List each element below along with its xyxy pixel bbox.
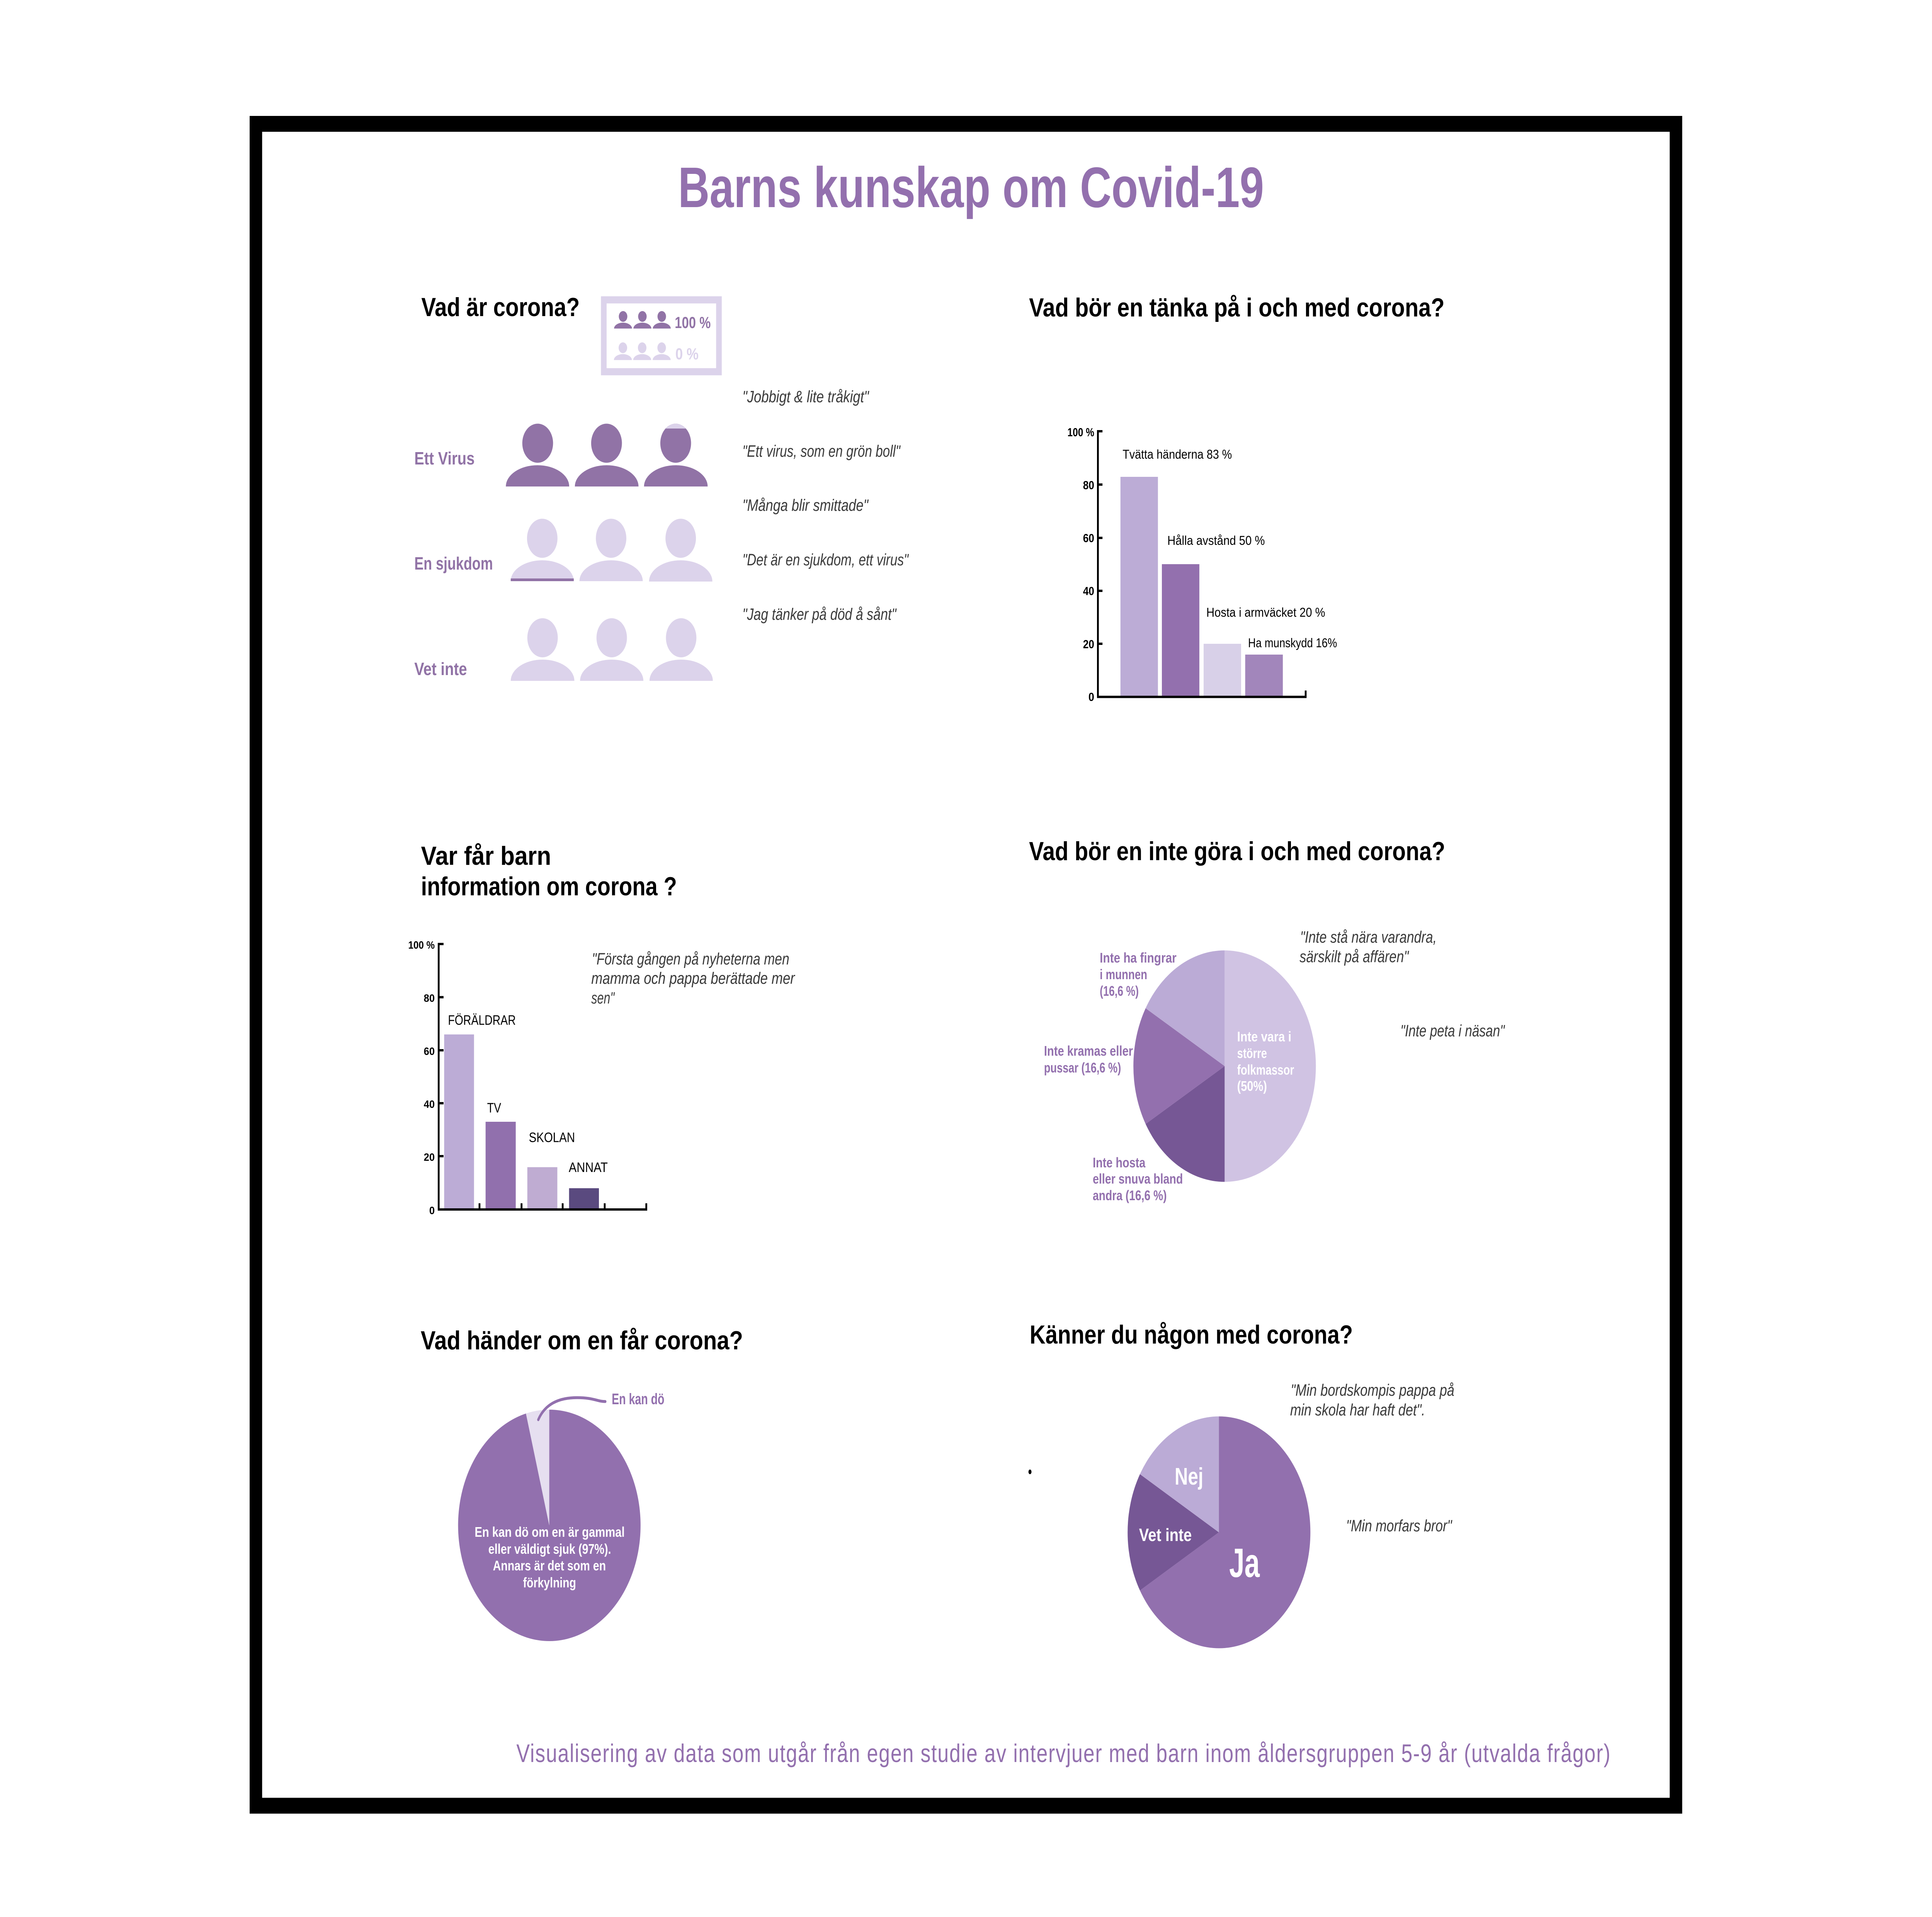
heading: Vad bör en tänka på: Vad bör en tänka på i och med corona? bbox=[1029, 293, 1445, 322]
pie label: Nej: Nej bbox=[1175, 1463, 1203, 1490]
quote: bordskompis: "Min bordskompis pappa på bbox=[1291, 1381, 1454, 1400]
panel: where children get information bbox=[408, 841, 796, 1217]
pie label: cough bbox=[1093, 1155, 1183, 1203]
pie label: fingers: i munnen bbox=[1100, 967, 1147, 982]
footer note: Visualisering av data som utgår från egen studie av intervjuer med barn inom åldersgruppen 5-9 år (utvalda frågor) bbox=[516, 1739, 1610, 1767]
quote: stand close: "Inte stå nära varandra, bbox=[1300, 928, 1437, 946]
pie label: crowds: folkmassor bbox=[1237, 1062, 1294, 1078]
bar labels: TV bbox=[487, 1100, 501, 1116]
pie chart: what not to do bbox=[1133, 951, 1316, 1182]
quote: mamma och pappa berättade mer bbox=[591, 969, 796, 988]
bar labels bbox=[448, 1012, 608, 1175]
pie label: Ja: Ja bbox=[1229, 1541, 1260, 1586]
pie chart: what happens bbox=[458, 1410, 641, 1641]
pie chart: know someone bbox=[1128, 1416, 1310, 1648]
quote: sen" bbox=[591, 989, 615, 1007]
row label: Ett Virus: Ett Virus bbox=[414, 449, 474, 468]
axis labels bbox=[1068, 425, 1094, 704]
pie label: hugs: pussar (16,6 %) bbox=[1044, 1060, 1121, 1075]
axis labels: 80 bbox=[1083, 478, 1094, 492]
quote: bordskompis: min skola har haft det". bbox=[1290, 1401, 1425, 1419]
bar labels: Tvätta händerna 83 % bbox=[1122, 447, 1232, 462]
quote: stand close: särskilt på affären" bbox=[1299, 947, 1410, 966]
legend label 100 percent: 100 % bbox=[675, 314, 711, 332]
axis labels: 40 bbox=[424, 1099, 435, 1111]
panel: do you know someone bbox=[1029, 1320, 1454, 1648]
legend icons: 0 percent row bbox=[614, 342, 671, 360]
panel: what not to do bbox=[1029, 837, 1505, 1203]
legend icons: 100 percent row bbox=[614, 311, 671, 328]
axis labels: 40 bbox=[1083, 584, 1094, 598]
quote: bordskompis bbox=[1290, 1381, 1454, 1419]
axis labels bbox=[408, 939, 435, 1217]
title: Barns kunskap om Covid-19 bbox=[678, 156, 1264, 219]
pie text: eller väldigt sjuk (97%). bbox=[488, 1541, 611, 1557]
heading: Var får barn information: information om corona ? bbox=[421, 872, 677, 901]
bar labels: ANNAT bbox=[569, 1160, 608, 1175]
bar chart: precautions bbox=[1068, 425, 1337, 704]
pie label: cough: eller snuva bland bbox=[1093, 1171, 1183, 1187]
axis labels: 60 bbox=[424, 1046, 435, 1058]
quote: morfars bror: "Min morfars bror" bbox=[1346, 1517, 1452, 1535]
heading: Var får barn information: Var får barn bbox=[421, 841, 551, 870]
panel: what is corona bbox=[414, 293, 909, 681]
heading: Vad är corona: Vad är corona? bbox=[421, 293, 580, 321]
quote: "Första gången på nyheterna men bbox=[592, 950, 789, 968]
axes bbox=[439, 944, 646, 1209]
pie label: Vet inte: Vet inte bbox=[1139, 1525, 1192, 1545]
pie text: Annars är det som en bbox=[493, 1558, 606, 1573]
legend frame bbox=[604, 300, 719, 372]
bars bbox=[444, 1034, 599, 1209]
panel: what happens bbox=[421, 1326, 743, 1641]
quote bbox=[591, 950, 796, 1007]
quote: stand close bbox=[1299, 928, 1437, 966]
bar labels: SKOLAN bbox=[529, 1129, 575, 1145]
panel: what to think about bbox=[1029, 293, 1445, 704]
axis labels: 0 bbox=[429, 1205, 435, 1217]
axis labels: 80 bbox=[424, 992, 435, 1004]
heading: Var får barn information bbox=[421, 841, 677, 901]
pie text bbox=[474, 1524, 625, 1590]
pie text: En kan dö om en är gammal bbox=[474, 1524, 625, 1540]
quotes: "Jobbigt & lite tråkigt" bbox=[742, 388, 870, 406]
quotes: "Det är en sjukdom, ett virus" bbox=[742, 551, 909, 569]
legend label 0 percent: 0 % bbox=[675, 345, 699, 363]
pie label: hugs bbox=[1044, 1043, 1133, 1075]
quotes: "Ett virus, som en grön boll" bbox=[742, 442, 901, 461]
axis labels: 100 % bbox=[1068, 425, 1094, 439]
pie label: crowds: större bbox=[1237, 1046, 1267, 1061]
axis labels: 100 % bbox=[408, 939, 435, 951]
axis labels: 20 bbox=[424, 1152, 435, 1163]
quotes bbox=[742, 388, 909, 624]
heading: Vad händer: Vad händer om en får corona? bbox=[421, 1326, 743, 1355]
axis labels: 60 bbox=[1083, 531, 1094, 545]
people row: Ett Virus bbox=[506, 424, 707, 486]
row label: En sjukdom: En sjukdom bbox=[414, 554, 493, 573]
pie text: förkylning bbox=[523, 1575, 576, 1590]
bar labels: FÖRÄLDRAR bbox=[448, 1012, 516, 1028]
outer black frame bbox=[256, 124, 1676, 1806]
row label: Vet inte: Vet inte bbox=[414, 659, 467, 679]
pie label: hugs: Inte kramas eller bbox=[1044, 1043, 1133, 1059]
people row: Vet inte bbox=[511, 618, 713, 681]
bar labels bbox=[1122, 447, 1337, 650]
bar labels: Hålla avstånd 50 % bbox=[1167, 534, 1265, 548]
bar labels: Ha munskydd 16% bbox=[1248, 636, 1337, 650]
pie label: fingers: (16,6 %) bbox=[1100, 983, 1139, 999]
heading: Vad bör en inte göra: Vad bör en inte göra i och med corona? bbox=[1029, 837, 1445, 866]
pie label: crowds: Inte vara i bbox=[1237, 1029, 1291, 1044]
pie label: crowds bbox=[1237, 1029, 1294, 1094]
pie label: crowds: (50%) bbox=[1237, 1078, 1267, 1094]
axis labels: 0 bbox=[1088, 690, 1094, 704]
pie label: cough: Inte hosta bbox=[1093, 1155, 1146, 1170]
quotes: "Många blir smittade" bbox=[742, 496, 869, 515]
axes bbox=[1098, 431, 1306, 697]
bars bbox=[1121, 477, 1283, 697]
bar labels: Hosta i armväcket 20 % bbox=[1206, 606, 1325, 620]
callout line bbox=[538, 1398, 605, 1420]
stray dot bbox=[1029, 1470, 1032, 1474]
quote: nose: "Inte peta i näsan" bbox=[1400, 1022, 1505, 1040]
quotes: "Jag tänker på död å sånt" bbox=[742, 605, 897, 624]
pie label: fingers: Inte ha fingrar bbox=[1100, 950, 1177, 966]
heading: Känner du någon: Känner du någon med corona? bbox=[1030, 1320, 1353, 1349]
axis labels: 20 bbox=[1083, 638, 1094, 651]
bar chart: sources bbox=[408, 939, 646, 1217]
people row: En sjukdom bbox=[511, 519, 713, 582]
callout label: En kan dö bbox=[612, 1390, 664, 1408]
pie label: fingers bbox=[1100, 950, 1177, 999]
pie label: cough: andra (16,6 %) bbox=[1093, 1188, 1167, 1203]
legend box bbox=[604, 300, 719, 372]
